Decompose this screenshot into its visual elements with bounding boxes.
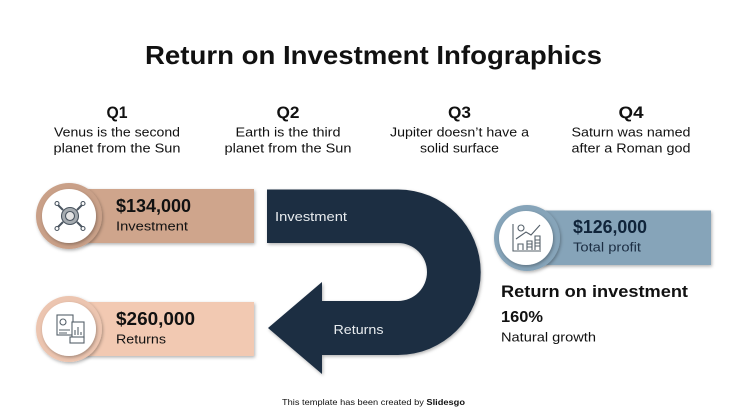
- column: Q2: [224, 104, 352, 156]
- text block: return on investment: 160%: [501, 309, 543, 326]
- column: Q4: Q4: [618, 104, 644, 122]
- column: Q2: planet from the Sun: [224, 140, 352, 156]
- column: Q1: Q1: [106, 104, 128, 122]
- text block: return on investment: [501, 282, 688, 344]
- column: Q4: after a Roman god: [572, 140, 690, 156]
- column: Q1: planet from the Sun: [54, 140, 180, 156]
- value: $126,000: $126,000: [573, 217, 647, 237]
- panel: total profit card: [494, 205, 711, 271]
- column: Q4: Saturn was named: [572, 124, 690, 140]
- icon: investment network: [55, 202, 85, 230]
- column: Q3: [390, 104, 530, 156]
- arrow: U-turn from investment to returns: [267, 190, 481, 374]
- icon: documents: [57, 315, 84, 343]
- label: Returns: Returns: [116, 332, 167, 346]
- column: Q3: Q3: [448, 104, 471, 122]
- column: Q2: Q2: [276, 104, 300, 122]
- panel: investment card: [36, 183, 254, 249]
- column: Q1: [54, 104, 180, 156]
- text block: return on investment: Return on investment: [501, 282, 688, 301]
- footer credit: This template has been created by Slidesgo: [282, 397, 465, 407]
- icon: growth chart with coins: [513, 224, 541, 251]
- column: Q2: Earth is the third: [236, 124, 340, 140]
- column: Q4: [572, 104, 690, 156]
- column: Q3: Jupiter doesn’t have a: [390, 124, 530, 140]
- text block: return on investment: Natural growth: [501, 330, 596, 344]
- column: Q1: Venus is the second: [54, 124, 180, 140]
- arrow label: Returns: Returns: [334, 322, 384, 337]
- panel: returns card: [36, 296, 254, 362]
- label: Investment: Investment: [116, 218, 188, 234]
- arrow label: Investment: Investment: [275, 209, 347, 224]
- value: $260,000: $260,000: [116, 309, 195, 329]
- label: Total profit: Total profit: [573, 240, 641, 254]
- value: $134,000: $134,000: [116, 196, 191, 216]
- title: Return on Investment Infographics: [145, 40, 602, 70]
- column: Q3: solid surface: [420, 140, 499, 156]
